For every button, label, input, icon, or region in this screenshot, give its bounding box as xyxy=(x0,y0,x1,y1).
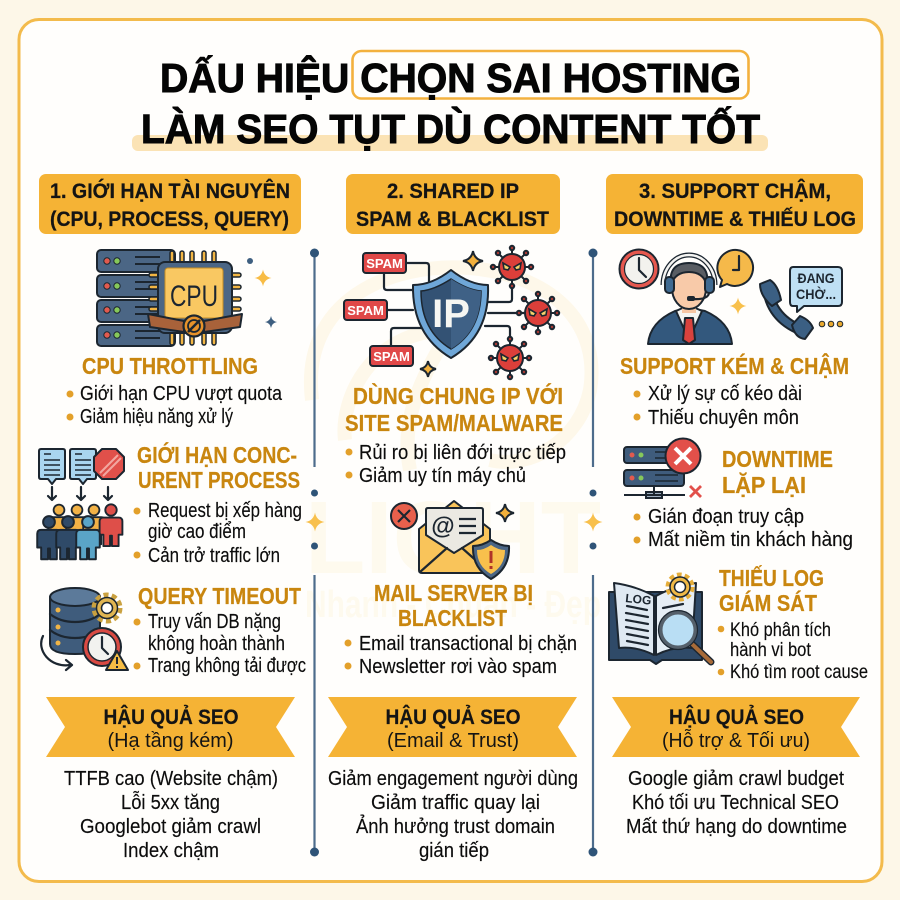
list: SEO consequences 1: TTFB cao (Website chậm) xyxy=(64,768,278,790)
column header 1: 1. GIỚI HẠN TÀI NGUYÊN xyxy=(50,179,290,203)
column header 3: DOWNTIME & THIẾU LOG xyxy=(614,208,856,231)
watermark logo xyxy=(311,267,592,470)
icon: support agent waiting on phone xyxy=(620,250,843,344)
list: SEO consequences 2: Ảnh hưởng trust domain xyxy=(356,815,555,838)
list: missing log: Khó phân tích xyxy=(730,620,831,641)
ribbon: consequence 1: HẬU QUẢ SEO xyxy=(104,705,238,729)
icon: IP shield with spam and viruses: IP xyxy=(432,292,470,336)
column divider left xyxy=(306,248,324,856)
heading: missing log: GIÁM SÁT xyxy=(719,589,817,616)
list: query timeout: Trang không tải được xyxy=(148,655,306,677)
ribbon: consequence 2: HẬU QUẢ SEO xyxy=(386,705,520,729)
list: SEO consequences 1: Index chậm xyxy=(123,840,219,862)
list: mail server: Newsletter rơi vào spam xyxy=(359,656,557,678)
heading: downtime xyxy=(722,446,833,498)
heading: concurrent process: GIỚI HẠN CONC- xyxy=(137,441,297,468)
list: SEO consequences 3: Google giảm crawl budget xyxy=(628,768,844,790)
list: CPU throttling: Giới hạn CPU vượt quota xyxy=(80,383,283,405)
heading: mail server: MAIL SERVER BỊ xyxy=(374,580,533,606)
list: SEO consequences 2: Giảm traffic quay lại xyxy=(371,792,540,814)
heading: CPU throttling: CPU THROTTLING xyxy=(82,353,258,379)
heading: query timeout: QUERY TIMEOUT xyxy=(138,583,301,609)
ribbon: consequence 3 xyxy=(612,697,860,757)
list: CPU throttling: Giảm hiệu năng xử lý xyxy=(80,406,233,428)
list: SEO consequences 1: Googlebot giảm crawl xyxy=(80,816,261,838)
list: mail server xyxy=(344,633,577,678)
icon: support agent waiting on phone: ĐANG xyxy=(798,271,834,286)
column header 1: (CPU, PROCESS, QUERY) xyxy=(50,208,289,231)
list: support: Thiếu chuyên môn xyxy=(648,407,799,429)
list: CPU throttling xyxy=(66,383,283,428)
icon: log book with gear and magnifier: LOG xyxy=(625,591,652,608)
heading: shared IP: SITE SPAM/MALWARE xyxy=(345,410,563,436)
list: downtime: Gián đoạn truy cập xyxy=(648,506,804,528)
list: shared IP: Giảm uy tín máy chủ xyxy=(359,465,526,487)
ribbon: consequence 2 xyxy=(328,697,577,757)
list: downtime: Mất niềm tin khách hàng xyxy=(648,529,853,551)
column header 3 xyxy=(606,174,863,234)
column header 1 xyxy=(39,174,301,234)
ribbon: consequence 3: HẬU QUẢ SEO xyxy=(669,705,804,729)
list: concurrent process xyxy=(134,500,302,567)
heading: shared IP: DÙNG CHUNG IP VỚI xyxy=(353,382,563,409)
list: downtime xyxy=(634,506,853,551)
list: mail server: Email transactional bị chặn xyxy=(359,633,577,655)
icon: log book with gear and magnifier xyxy=(609,575,711,664)
icon: envelope with warning shield xyxy=(391,501,514,579)
icon: requests and queue of people xyxy=(37,449,124,559)
title: LÀM SEO TỤT DÙ CONTENT TỐT xyxy=(141,106,760,152)
title: DẤU HIỆU CHỌN SAI HOSTING xyxy=(160,55,741,101)
heading: concurrent process xyxy=(137,441,300,493)
icon: support agent waiting on phone: CHỜ... xyxy=(796,287,836,302)
icon: IP shield with spam and viruses: SPAM xyxy=(373,349,410,364)
heading: mail server xyxy=(374,580,533,631)
column header 2 xyxy=(346,174,560,234)
icon: database with clock xyxy=(41,588,128,670)
icon: CPU on server with belt: CPU xyxy=(170,280,218,313)
list: missing log xyxy=(718,620,868,683)
icon: CPU on server with belt xyxy=(97,250,277,346)
list: missing log: Khó tìm root cause xyxy=(730,662,868,683)
column header 2: 2. SHARED IP xyxy=(387,180,519,203)
list: SEO consequences 2: gián tiếp xyxy=(419,840,489,862)
watermark text: Nhanh - Chuẩn - Đẹp xyxy=(305,584,601,626)
icon: IP shield with spam and viruses: SPAM xyxy=(366,256,403,271)
watermark text: LIGHT xyxy=(305,480,601,595)
list: SEO consequences 1: Lỗi 5xx tăng xyxy=(121,791,220,814)
list: SEO consequences 1 xyxy=(64,768,278,862)
list: shared IP: Rủi ro bị liên đới trực tiếp xyxy=(359,442,566,464)
list: SEO consequences 3 xyxy=(626,768,847,838)
list: SEO consequences 2: Giảm engagement người dùng xyxy=(328,768,578,790)
icon: server with X xyxy=(624,438,701,498)
heading: downtime: DOWNTIME xyxy=(722,446,833,472)
heading: missing log: THIẾU LOG xyxy=(719,564,824,591)
title xyxy=(132,51,768,152)
ribbon: consequence 1 xyxy=(46,697,295,757)
list: missing log: hành vi bot xyxy=(730,640,812,661)
ribbon: consequence 3: (Hỗ trợ & Tối ưu) xyxy=(662,729,810,752)
heading: missing log xyxy=(719,564,824,616)
list: concurrent process: Cản trở traffic lớn xyxy=(148,545,280,567)
list: query timeout: không hoàn thành xyxy=(148,633,285,655)
heading: shared IP xyxy=(345,382,563,436)
list: concurrent process: Request bị xếp hàng xyxy=(148,500,302,522)
heading: support: SUPPORT KÉM & CHẬM xyxy=(620,352,849,379)
heading: mail server: BLACKLIST xyxy=(398,605,507,631)
list: SEO consequences 3: Khó tối ưu Technical SEO xyxy=(632,792,839,814)
ribbon: consequence 1: (Hạ tầng kém) xyxy=(108,730,234,752)
heading: concurrent process: URENT PROCESS xyxy=(138,467,300,493)
column header 2: SPAM & BLACKLIST xyxy=(356,208,549,231)
icon: envelope with warning shield: @ xyxy=(431,513,455,540)
heading: downtime: LẶP LẠI xyxy=(722,471,806,498)
icon: IP shield with spam and viruses: SPAM xyxy=(347,303,384,318)
list: support xyxy=(634,383,802,429)
list: query timeout xyxy=(134,611,306,677)
list: SEO consequences 3: Mất thứ hạng do downtime xyxy=(626,816,847,838)
column header 3: 3. SUPPORT CHẬM, xyxy=(639,179,831,203)
icon: IP shield with spam and viruses xyxy=(344,246,559,379)
list: support: Xử lý sự cố kéo dài xyxy=(648,383,802,405)
list: query timeout: Truy vấn DB nặng xyxy=(148,611,281,633)
ribbon: consequence 2: (Email & Trust) xyxy=(387,730,519,752)
list: shared IP xyxy=(346,442,566,487)
list: SEO consequences 2 xyxy=(328,768,578,862)
list: concurrent process: giờ cao điểm xyxy=(148,521,246,543)
column divider right xyxy=(584,248,602,856)
